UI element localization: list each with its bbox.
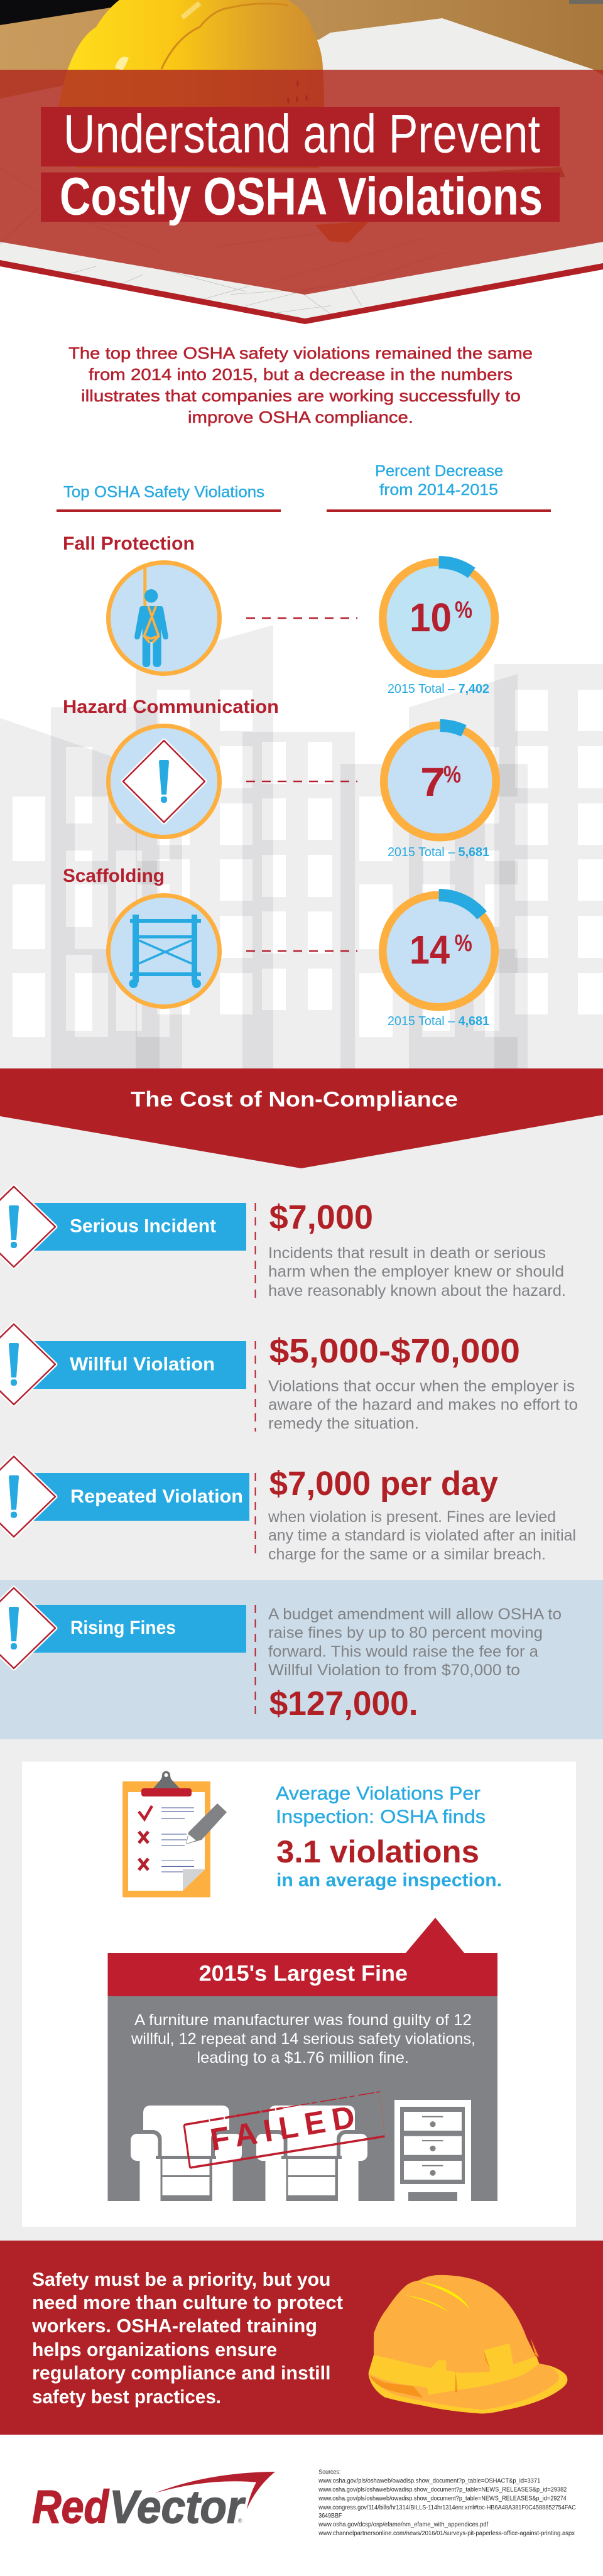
description: remedy the situation. bbox=[268, 1415, 419, 1432]
callout: average violations: 3.1 violations bbox=[276, 1834, 479, 1869]
title bar line 1 bbox=[41, 107, 560, 166]
donut: 7 percent: % bbox=[443, 761, 461, 788]
column heading: top violations: Top OSHA Safety Violations bbox=[63, 484, 264, 501]
icon: hard hat bbox=[368, 2275, 567, 2413]
logo: RedVector bbox=[32, 2472, 275, 2533]
label bar: Repeated Violation bbox=[70, 1486, 243, 1507]
label bar: Serious Incident bbox=[70, 1216, 216, 1237]
dashed connector 2 bbox=[246, 781, 357, 782]
building: left bbox=[51, 707, 160, 1068]
closing text: helps organizations ensure bbox=[32, 2339, 277, 2361]
description: aware of the hazard and makes no effort to bbox=[268, 1396, 578, 1414]
description: leading to a $1.76 million fine. bbox=[197, 2049, 409, 2067]
description: harm when the employer knew or should bbox=[268, 1263, 564, 1280]
icon: hazard diamond bbox=[108, 726, 220, 837]
building: right bbox=[409, 674, 518, 1068]
amount: $7,000 bbox=[269, 1198, 373, 1236]
label bar bbox=[19, 1605, 246, 1653]
building: tall centre-left bbox=[136, 625, 273, 1068]
description: when violation is present. Fines are levied bbox=[268, 1508, 556, 1526]
total: 7,402: 2015 Total – 7,402 bbox=[388, 682, 489, 696]
description bbox=[268, 1606, 562, 1679]
closing text: need more than culture to protect bbox=[32, 2291, 343, 2313]
banner: cost of non-compliance: The Cost of Non-Compliance bbox=[131, 1088, 458, 1112]
description bbox=[268, 1378, 578, 1432]
description: Willful Violation to from $70,000 to bbox=[268, 1661, 520, 1679]
description: have reasonably known about the hazard. bbox=[268, 1282, 566, 1300]
callout: average violations bbox=[276, 1783, 502, 1891]
label bar: Willful Violation bbox=[70, 1354, 215, 1375]
sources: www.osha.gov/dcsp/osp/efame/nm_efame_with_appendices.pdf bbox=[318, 2521, 489, 2528]
description: willful, 12 repeat and 14 serious safety violations, bbox=[131, 2030, 475, 2048]
donut: 14 percent: % bbox=[455, 930, 472, 957]
intro text: illustrates that companies are working successfully to bbox=[81, 386, 521, 405]
label bar: Rising Fines bbox=[70, 1617, 176, 1638]
building: centre bbox=[242, 732, 355, 1068]
row: serious incident bbox=[0, 1187, 566, 1300]
donut: 14 percent: 14 bbox=[410, 927, 450, 972]
logo: RedVector: Vector bbox=[109, 2481, 246, 2533]
icon: scaffold bbox=[108, 896, 220, 1006]
description bbox=[131, 2011, 475, 2067]
sources: Sources: bbox=[318, 2469, 340, 2476]
description: forward. This would raise the fee for a bbox=[268, 1643, 538, 1661]
building: far left bbox=[0, 718, 182, 1068]
hero photo: hard hat on blueprints bbox=[0, 0, 603, 327]
icon: warning diamond bbox=[0, 1457, 55, 1537]
dashed connector 1 bbox=[246, 617, 357, 619]
sources: www.osha.gov/pls/oshaweb/owadisp.show_document?p_table=NEWS_RELEASES&p_id=29382 bbox=[318, 2487, 567, 2494]
panel: closing statement bbox=[0, 2241, 603, 2435]
icon: warning diamond bbox=[0, 1324, 55, 1405]
description: A furniture manufacturer was found guilty of 12 bbox=[134, 2011, 472, 2029]
description: Violations that occur when the employer is bbox=[268, 1378, 575, 1395]
pointer triangle and header: 2015's Largest Fine bbox=[199, 1961, 408, 1986]
title bbox=[41, 104, 560, 226]
amount: $5,000-$70,000 bbox=[269, 1332, 520, 1370]
icon: warning diamond bbox=[0, 1588, 55, 1668]
building: centre-right bbox=[340, 764, 528, 1068]
intro text: from 2014 into 2015, but a decrease in the numbers bbox=[89, 365, 513, 384]
logo: RedVector: Red bbox=[32, 2481, 110, 2533]
donut: 7 percent: 7 bbox=[420, 759, 445, 805]
heading: fall protection: Fall Protection bbox=[63, 533, 195, 554]
dashed divider bbox=[255, 1473, 256, 1556]
column heading: percent decrease: Percent Decrease bbox=[375, 462, 503, 480]
banner: cost of non-compliance bbox=[0, 1068, 603, 1168]
hero red overlay chevron bbox=[0, 70, 603, 295]
description: raise fines by up to 80 percent moving bbox=[268, 1624, 543, 1642]
amount: $7,000 per day bbox=[269, 1465, 498, 1503]
description: charge for the same or a similar breach. bbox=[268, 1546, 546, 1563]
icon: clipboard checklist bbox=[122, 1771, 227, 1897]
sources: www.channelpartnersonline.com/news/2016/01/surveys-pit-paperless-office-against-printing.aspx bbox=[318, 2530, 575, 2537]
stamp: failed bbox=[184, 2092, 384, 2168]
callout: average violations: Inspection: OSHA finds bbox=[276, 1807, 486, 1827]
description bbox=[268, 1244, 566, 1300]
closing text: regulatory compliance and instill bbox=[32, 2362, 330, 2384]
pointer triangle and header bbox=[108, 1918, 497, 1996]
hero red bottom stripe bbox=[0, 260, 603, 324]
label bar bbox=[19, 1341, 246, 1389]
dashed divider bbox=[255, 1605, 256, 1718]
intro text bbox=[68, 344, 533, 427]
closing text: safety best practices. bbox=[32, 2386, 221, 2408]
heading: scaffolding: Scaffolding bbox=[63, 866, 165, 886]
closing text: Safety must be a priority, but you bbox=[32, 2268, 330, 2290]
heading: hazard communication: Hazard Communication bbox=[63, 697, 279, 717]
donut: 10 percent: % bbox=[455, 597, 472, 623]
closing text: workers. OSHA-related training bbox=[31, 2315, 317, 2337]
description: Incidents that result in death or serious bbox=[268, 1244, 546, 1262]
donut: 10 percent: 10 bbox=[410, 595, 452, 640]
panel: largest fine bbox=[108, 1918, 497, 2201]
sources bbox=[318, 2469, 576, 2537]
stamp: failed: FAILED bbox=[208, 2099, 357, 2158]
icon: warning diamond bbox=[0, 1187, 55, 1267]
intro text: improve OSHA compliance. bbox=[188, 408, 413, 427]
description: A budget amendment will allow OSHA to bbox=[268, 1606, 562, 1623]
panel: rising fines background bbox=[0, 1580, 603, 1739]
donut: 14 percent bbox=[383, 895, 495, 1007]
label bar bbox=[19, 1203, 246, 1251]
column heading: top violations bbox=[57, 484, 281, 512]
icon: filing cabinet bbox=[394, 2100, 471, 2201]
panel: inspection card bbox=[22, 1761, 576, 2227]
sources: 3649BBF bbox=[318, 2513, 342, 2519]
background buildings bbox=[0, 625, 603, 1068]
closing text bbox=[31, 2268, 343, 2408]
amount: $127,000. bbox=[269, 1685, 418, 1722]
label bar bbox=[19, 1473, 249, 1521]
icon: armchair 2 bbox=[253, 2106, 372, 2201]
description: any time a standard is violated after an initial bbox=[268, 1527, 576, 1545]
total: 4,681: 2015 Total – 4,681 bbox=[388, 1014, 489, 1028]
grey body bbox=[108, 1996, 497, 2201]
building: far right bbox=[494, 664, 603, 1068]
title bar line 2 bbox=[41, 172, 560, 222]
callout: average violations: in an average inspection. bbox=[276, 1870, 502, 1891]
dashed divider bbox=[255, 1203, 256, 1299]
row: repeated violation bbox=[0, 1457, 576, 1563]
sources: www.congress.gov/114/bills/hr1314/BILLS-114hr1314enr.xml#toc-HB6A48A381F0C4588852754FAC bbox=[318, 2504, 576, 2511]
total: 5,681: 2015 Total – 5,681 bbox=[388, 845, 489, 859]
logo: RedVector: ® bbox=[238, 2518, 242, 2524]
sources: www.osha.gov/pls/oshaweb/owadisp.show_document?p_table=NEWS_RELEASES&p_id=29274 bbox=[318, 2496, 567, 2503]
description bbox=[268, 1508, 576, 1563]
row: willful violation bbox=[0, 1324, 578, 1432]
panel: cost section background bbox=[0, 1068, 603, 2241]
sources: www.osha.gov/pls/oshaweb/owadisp.show_document?p_table=OSHACT&p_id=3371 bbox=[318, 2478, 541, 2485]
icon: armchair 1 bbox=[127, 2106, 246, 2201]
column heading: percent decrease bbox=[327, 462, 551, 512]
donut: 10 percent bbox=[383, 562, 495, 674]
column heading: percent decrease: from 2014-2015 bbox=[379, 481, 498, 499]
row: rising fines bbox=[0, 1588, 562, 1722]
icon: harnessed worker bbox=[108, 563, 220, 673]
donut: 7 percent bbox=[384, 726, 496, 837]
callout: average violations: Average Violations Per bbox=[276, 1783, 481, 1804]
intro text: The top three OSHA safety violations remained the same bbox=[68, 344, 533, 362]
dashed divider bbox=[255, 1341, 256, 1432]
dashed connector 3 bbox=[246, 950, 357, 952]
